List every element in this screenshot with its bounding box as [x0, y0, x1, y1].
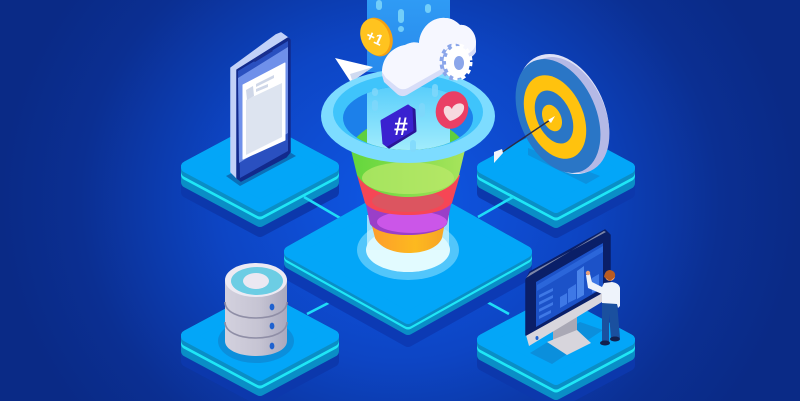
- connector lines: [304, 197, 513, 314]
- platform: top right: [483, 129, 629, 232]
- funnel layer: red: [357, 175, 460, 215]
- platform: bottom right: [483, 301, 629, 401]
- icon: hashtag: #: [394, 113, 408, 141]
- funnel base glow: [357, 215, 459, 280]
- icon: hashtag: [382, 106, 415, 147]
- funnel rim: [321, 71, 495, 163]
- platform: top left: [187, 128, 333, 231]
- icon: heart: [431, 87, 473, 133]
- person: [586, 270, 620, 346]
- icon: database cylinder: [218, 263, 294, 363]
- funnel layer: purple: [365, 200, 452, 235]
- icon: coin: [355, 13, 398, 61]
- icon: cloud: [382, 18, 476, 96]
- icon: phone: [226, 33, 296, 186]
- icon: monitor with person: [526, 230, 620, 364]
- platform: central: [290, 186, 526, 341]
- funnel layer: orange: [371, 222, 445, 253]
- platform: bottom left: [187, 297, 333, 400]
- light beam: [367, 0, 450, 72]
- light beam droplets: [372, 0, 438, 152]
- icon: target with arrow: [494, 39, 627, 189]
- icon: coin: +1: [363, 27, 386, 50]
- icon: gear: [442, 46, 470, 78]
- funnel layer: green: [351, 150, 465, 197]
- icon: paper plane: [335, 58, 373, 81]
